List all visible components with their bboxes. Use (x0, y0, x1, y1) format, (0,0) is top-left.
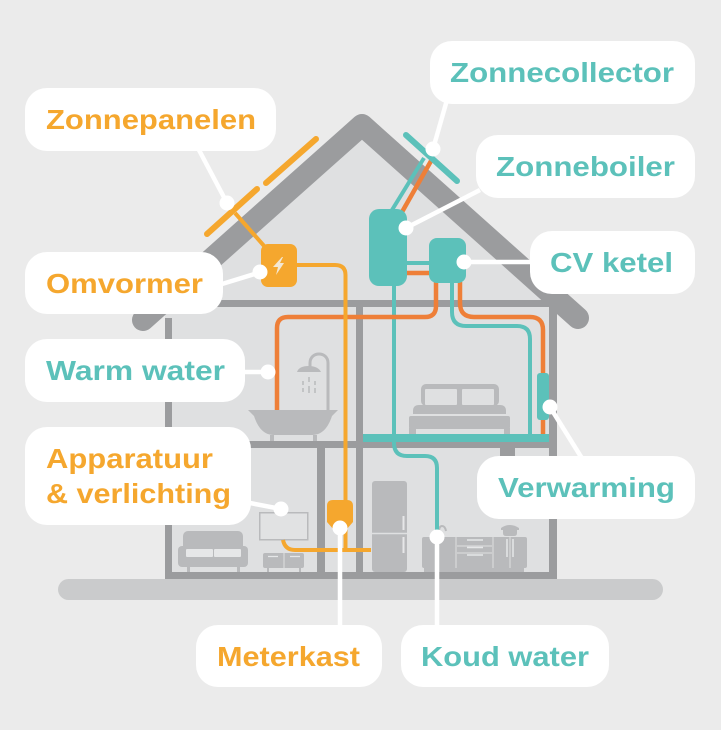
house structure (143, 125, 578, 579)
orange pipes (277, 161, 543, 436)
furniture: bathtub and shower (248, 354, 338, 441)
solar panels (207, 139, 316, 234)
central heating boiler (429, 238, 466, 283)
label: CV ketel (530, 231, 695, 294)
label: Verwarming (477, 456, 695, 519)
label: Zonnecollector: Zonnecollector (450, 57, 674, 88)
yellow electrical wiring (235, 213, 371, 550)
label: Zonneboiler: Zonneboiler (496, 151, 675, 182)
connector lines (199, 100, 583, 626)
teal pipes (392, 158, 530, 536)
label: Zonnepanelen: Zonnepanelen (46, 104, 256, 135)
label: Apparatuur & verlichting: & verlichting (46, 478, 231, 509)
label: Zonnepanelen (25, 88, 276, 151)
label: Apparatuur & verlichting (25, 427, 251, 525)
connector dots (220, 142, 558, 544)
solar collector (406, 135, 457, 181)
label: CV ketel: CV ketel (550, 247, 673, 278)
furniture: kitchen cabinets and pot (422, 525, 527, 572)
label: Koud water: Koud water (421, 641, 589, 672)
label: Zonneboiler (476, 135, 695, 198)
label: Verwarming: Verwarming (498, 472, 675, 503)
label: Omvormer: Omvormer (46, 268, 203, 299)
inverter (261, 244, 297, 287)
solar boiler tank (369, 209, 407, 286)
label: Meterkast: Meterkast (217, 641, 360, 672)
label: Apparatuur & verlichting: Apparatuur (46, 443, 213, 474)
label: Zonnecollector (430, 41, 695, 104)
floor heating (363, 434, 549, 442)
label: Omvormer (25, 252, 223, 314)
label: Warm water (25, 339, 245, 402)
furniture: television and cabinet (260, 513, 308, 572)
meter cupboard (327, 500, 353, 530)
label: Koud water (401, 625, 609, 687)
furniture: fridge (372, 481, 407, 572)
label: Meterkast (196, 625, 382, 687)
radiator (537, 373, 549, 420)
furniture: sofa (178, 531, 248, 572)
label: Warm water: Warm water (46, 355, 225, 386)
ground (58, 579, 663, 600)
furniture: bed (409, 384, 510, 434)
